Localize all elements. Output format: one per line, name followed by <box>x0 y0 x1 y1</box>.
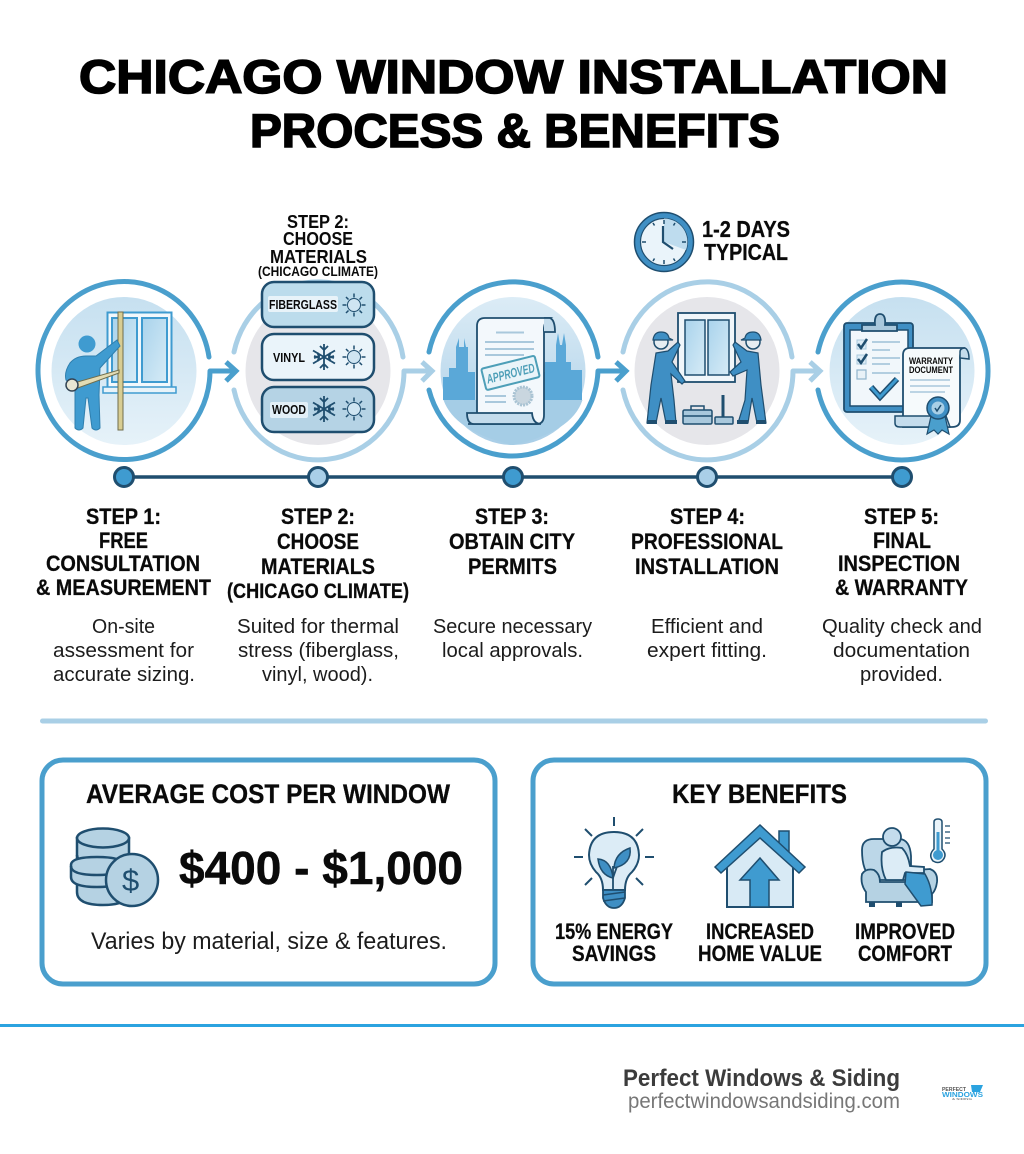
warranty document: DOCUMENT <box>909 365 953 375</box>
benefit label: home value: HOME VALUE <box>698 941 822 966</box>
arrow: step 2 to 3 <box>404 362 432 381</box>
duration callout: 1-2 days typical: TYPICAL <box>704 239 788 265</box>
step 2 text: vinyl, wood). <box>262 664 373 686</box>
icon: person in armchair with thermometer <box>862 819 950 907</box>
step 4 text: STEP 4: <box>670 504 745 529</box>
footer logo: & SIDING <box>952 1097 973 1101</box>
material card: wood <box>262 387 374 432</box>
step 2 top label <box>258 212 378 279</box>
step 4 text: PROFESSIONAL <box>631 529 783 554</box>
step 5 text <box>822 504 982 686</box>
step 4 circle: installation <box>623 282 793 460</box>
footer brand text: Perfect Windows & Siding <box>623 1065 900 1092</box>
footer logo: WINDOWS <box>942 1092 983 1099</box>
arrow: step 1 to 2 <box>210 362 236 381</box>
cost range: $400 - $1,000 <box>179 842 463 894</box>
step 1 text: accurate sizing. <box>53 664 195 686</box>
panel: key benefits <box>533 760 986 984</box>
step 2 circle: materials <box>234 282 404 460</box>
step 2 text: (CHICAGO CLIMATE) <box>227 580 409 603</box>
approved stamp: APPROVED <box>484 360 537 387</box>
warranty document <box>895 348 969 434</box>
step 5 text: STEP 5: <box>864 504 939 529</box>
worker right <box>730 332 766 424</box>
step 1 text <box>36 504 211 686</box>
step 4 text: INSTALLATION <box>635 554 779 579</box>
step 3 circle: permits <box>429 282 598 456</box>
benefit label: energy savings: 15% ENERGY <box>555 919 673 944</box>
panel: average cost per window <box>42 760 495 984</box>
benefit label: home value: INCREASED <box>706 919 814 944</box>
benefit label: comfort <box>855 919 955 966</box>
step 2 text: STEP 2: <box>281 504 355 529</box>
step 5 text: documentation <box>833 640 970 662</box>
step 1 text: On-site <box>92 616 155 638</box>
step 1 text: assessment for <box>53 640 194 662</box>
material card: fiberglass: FIBERGLASS <box>269 297 337 312</box>
step 3 text: OBTAIN CITY <box>449 529 575 554</box>
title <box>79 50 948 157</box>
icon: house with up arrow <box>715 825 805 907</box>
step 2 top label: MATERIALS <box>270 247 367 267</box>
step 3 text <box>433 504 592 662</box>
step 2 text: Suited for thermal <box>237 616 399 638</box>
icon: dollar sign: $ <box>122 863 139 898</box>
worker left <box>647 332 685 424</box>
step 3 text: local approvals. <box>442 640 583 662</box>
step 5 text: INSPECTION <box>838 551 960 576</box>
benefit label: comfort: COMFORT <box>858 941 952 966</box>
icon: coins <box>71 828 158 906</box>
footer logo <box>942 1085 983 1101</box>
step 1 text: & MEASUREMENT <box>36 575 211 600</box>
step 3 text: Secure necessary <box>433 616 592 638</box>
step 2 top label: STEP 2: <box>287 212 349 232</box>
step 3 text: STEP 3: <box>475 504 549 529</box>
step 5 text: Quality check and <box>822 616 982 638</box>
timeline dots <box>114 468 912 486</box>
paint tool <box>715 395 733 424</box>
title: PROCESS & BENEFITS <box>250 104 780 157</box>
step 1 circle: measuring a window <box>38 282 210 460</box>
duration callout: 1-2 days typical <box>634 212 790 272</box>
step 4 text: Efficient and <box>651 616 763 638</box>
step 5 text: FINAL <box>873 528 931 553</box>
step 1 text: CONSULTATION <box>46 551 200 576</box>
warranty document: WARRANTY <box>909 356 953 366</box>
benefit label: energy savings <box>555 919 673 966</box>
step 1 text: FREE <box>99 528 148 553</box>
footer logo: PERFECT <box>942 1087 966 1093</box>
step 3 text: PERMITS <box>468 554 557 579</box>
benefit label: energy savings: SAVINGS <box>572 941 656 966</box>
material card: wood: WOOD <box>272 402 306 417</box>
benefit label: comfort: IMPROVED <box>855 919 955 944</box>
icon: clock <box>634 212 694 272</box>
step 5 circle: inspection and warranty <box>818 282 988 460</box>
arrow: step 3 to 4 <box>598 362 626 381</box>
toolbox <box>683 406 712 424</box>
material card: vinyl <box>262 334 374 380</box>
material card: fiberglass <box>262 282 374 327</box>
step 2 top label: CHOOSE <box>283 229 353 249</box>
benefit label: home value <box>698 919 822 966</box>
cost note: Varies by material, size & features. <box>91 928 447 955</box>
icon: light bulb with leaves <box>574 817 654 908</box>
step 5 text: provided. <box>860 664 943 686</box>
step 5 text: & WARRANTY <box>835 575 968 600</box>
step 4 text: expert fitting. <box>647 640 767 662</box>
step 2 text: stress (fiberglass, <box>238 640 399 662</box>
step 1 text: STEP 1: <box>86 504 161 529</box>
arrow: step 4 to 5 <box>793 362 820 381</box>
panel heading: benefits: KEY BENEFITS <box>672 779 847 809</box>
approved stamp <box>481 356 540 390</box>
material card: vinyl: VINYL <box>273 350 305 365</box>
footer brand text: perfectwindowsandsiding.com <box>628 1090 900 1113</box>
duration callout: 1-2 days typical: 1-2 DAYS <box>702 216 790 242</box>
step 2 top label: (CHICAGO CLIMATE) <box>258 264 378 279</box>
step 2 text: CHOOSE <box>277 529 359 554</box>
clipboard <box>844 314 913 412</box>
footer brand text <box>623 1065 900 1113</box>
timeline line <box>124 475 902 479</box>
title: CHICAGO WINDOW INSTALLATION <box>79 50 948 103</box>
step 2 text <box>227 504 409 686</box>
step 2 text: MATERIALS <box>261 554 375 579</box>
step 4 text <box>631 504 783 662</box>
panel heading: cost: AVERAGE COST PER WINDOW <box>86 779 450 809</box>
